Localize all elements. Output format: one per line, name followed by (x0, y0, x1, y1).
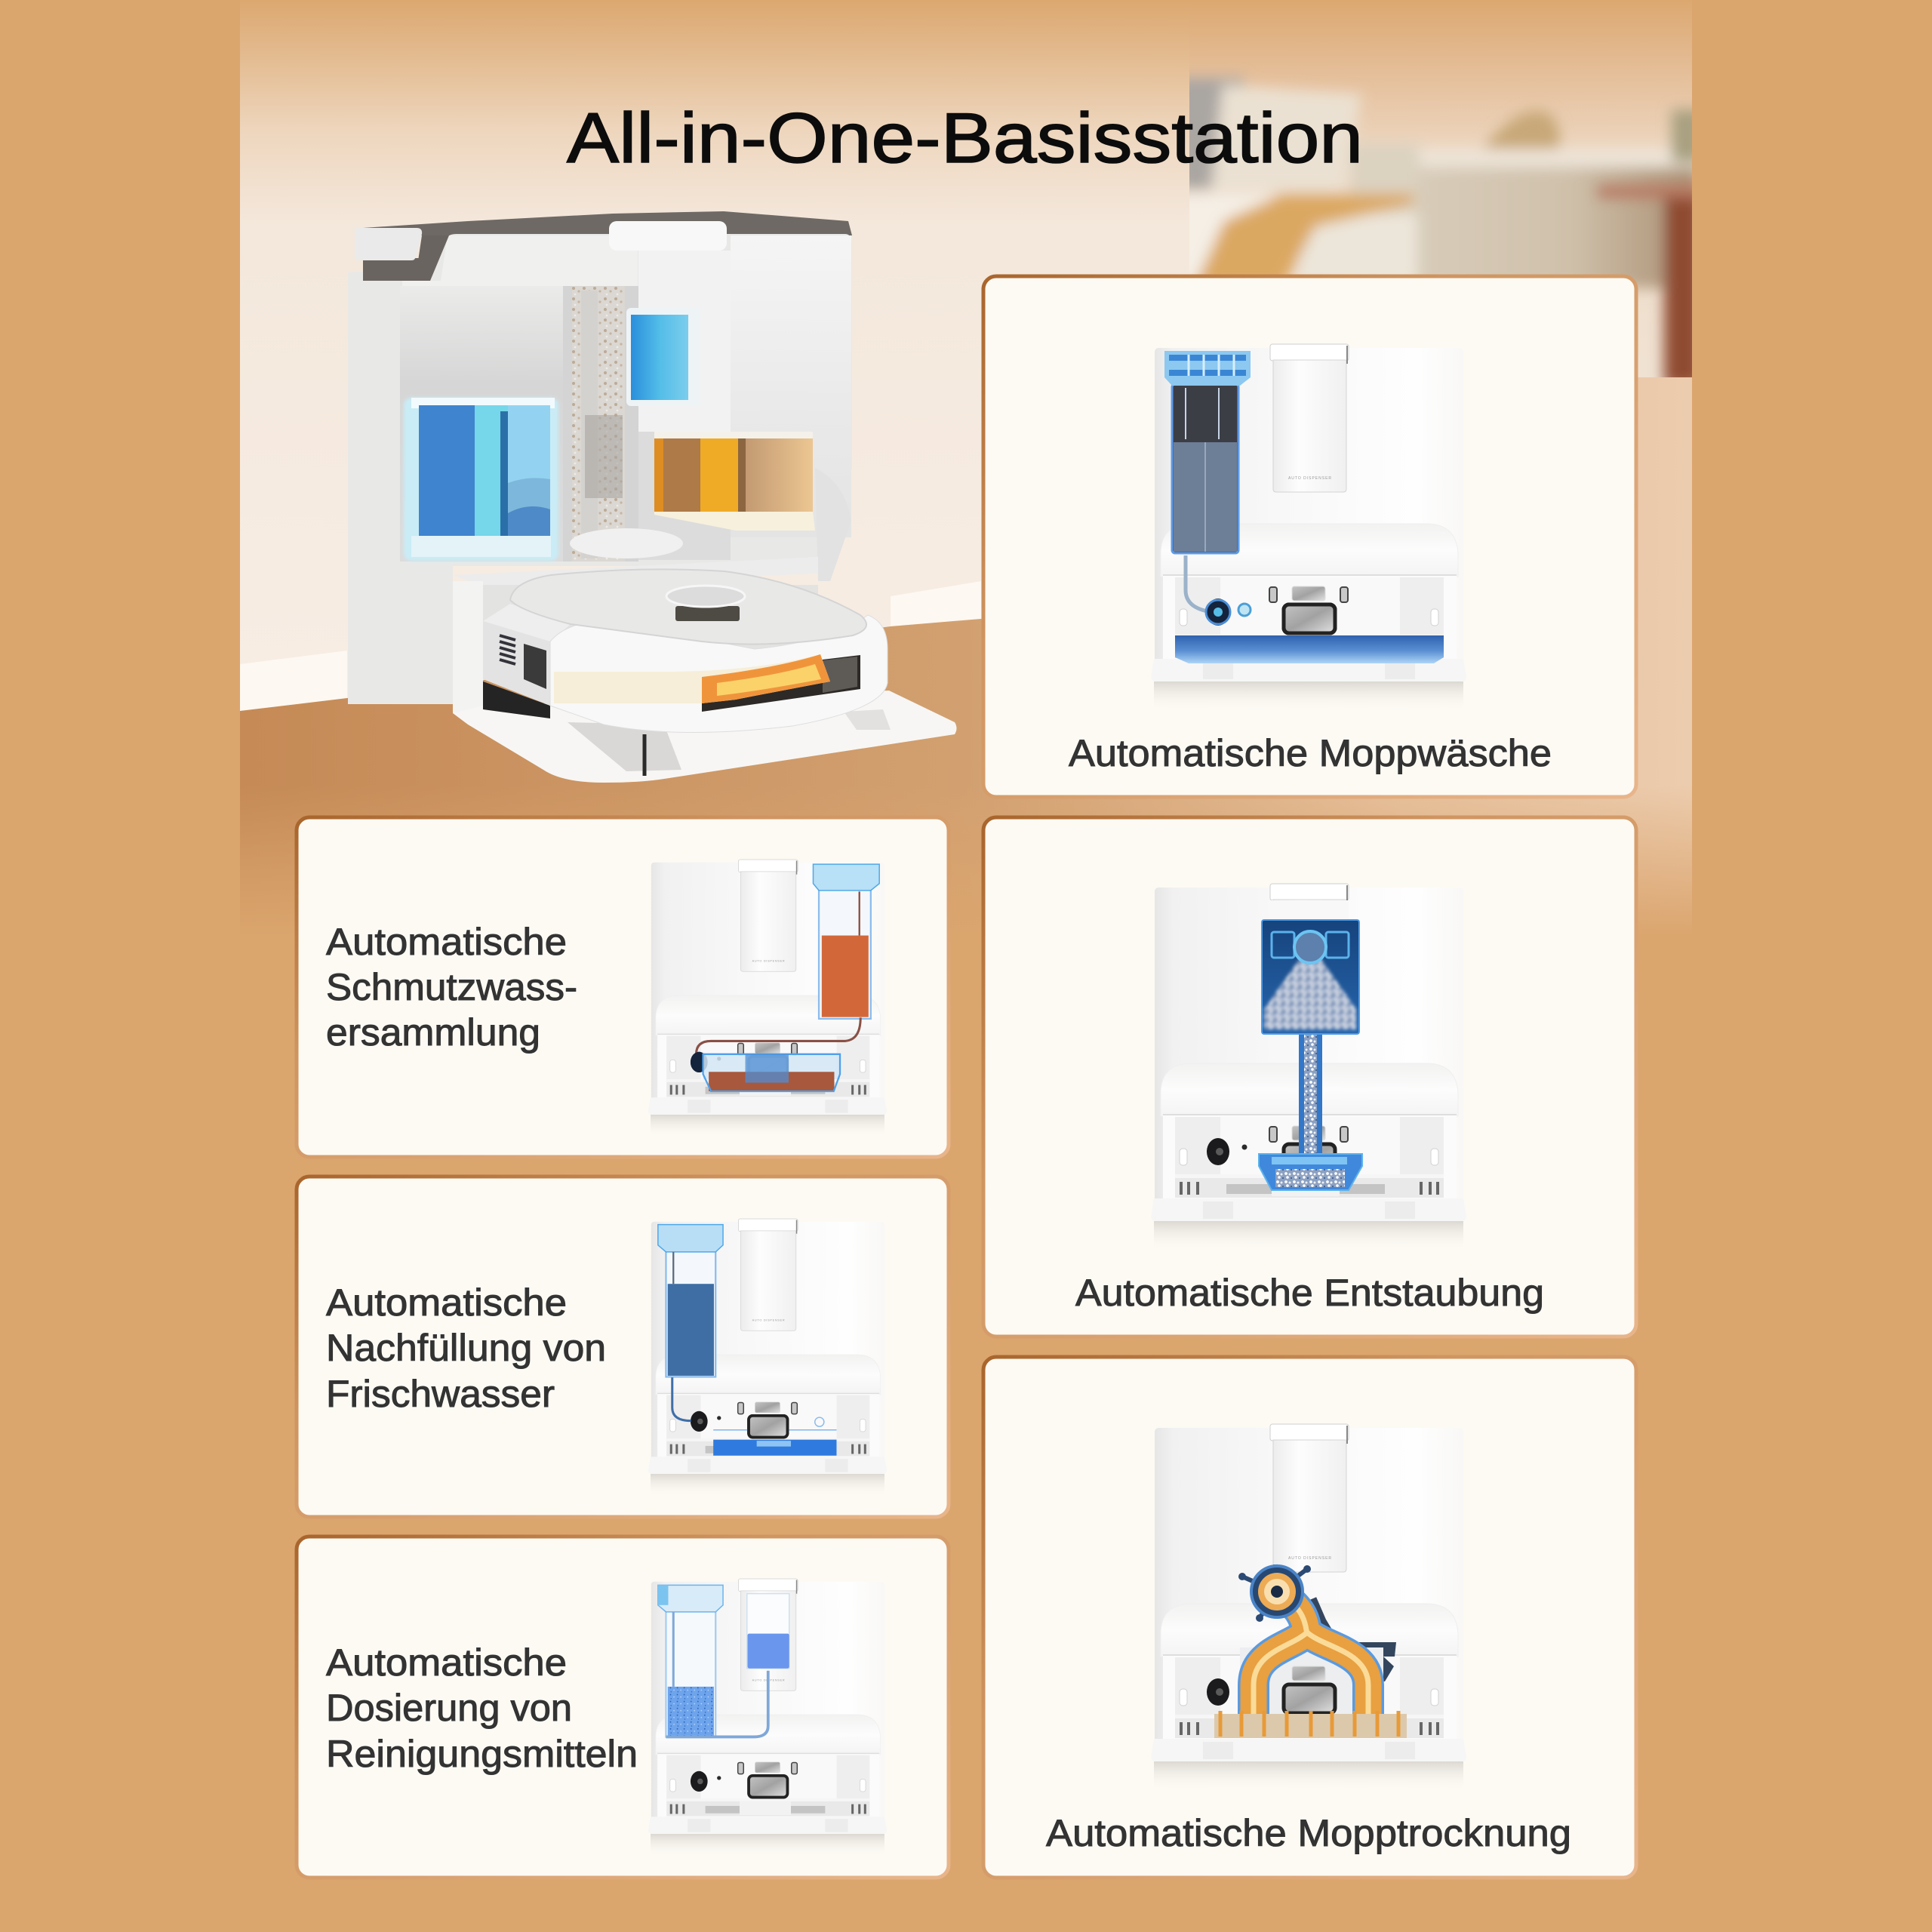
small blue detergent tank (626, 308, 700, 406)
tray wall (453, 581, 483, 713)
robot vacuum (483, 569, 888, 733)
label: Automatische Moppwäsche (1069, 732, 1552, 774)
panel: Automatische Mopptrocknung (983, 1357, 1636, 1878)
panel: Automatische Moppwäsche (983, 276, 1636, 797)
dock plate (453, 691, 957, 783)
illustration: detergent dosing (648, 1579, 887, 1857)
illustration: dirty water collection (648, 860, 887, 1137)
panel: Automatische Nachfüllung von Frischwasser (297, 1177, 949, 1517)
orange dirty water tank (654, 432, 815, 531)
label: Frischwasser (326, 1373, 555, 1415)
illustration: mop drying (1151, 1424, 1466, 1792)
panel: Automatische Entstaubung (983, 817, 1636, 1337)
panel: Automatische Schmutzwassersammlung (297, 817, 949, 1157)
label (326, 1281, 606, 1415)
title: All-in-One-Basisstation (567, 98, 1363, 177)
label (326, 1641, 638, 1775)
label: ersammlung (326, 1011, 540, 1054)
background photo: living room (240, 0, 1703, 936)
label: Automatische (326, 1641, 567, 1684)
label: Automatische (326, 921, 567, 963)
label (326, 921, 577, 1054)
label: Dosierung von (326, 1687, 572, 1729)
illustration: dust collection (1151, 884, 1466, 1251)
label: Automatische Mopptrocknung (1046, 1812, 1571, 1854)
label: Schmutzwass- (326, 966, 577, 1008)
label: Automatische (326, 1281, 567, 1324)
hero base station with robot (348, 211, 957, 783)
label: Reinigungsmitteln (326, 1733, 638, 1775)
illustration: mop washing station (1151, 344, 1466, 712)
blue clean water tank (404, 398, 558, 561)
label: Nachfüllung von (326, 1327, 606, 1369)
label: Automatische Entstaubung (1075, 1272, 1544, 1314)
illustration: fresh water refill (648, 1219, 887, 1497)
panel: Automatische Dosierung von Reinigungsmitteln (297, 1537, 949, 1878)
station body (348, 211, 852, 704)
